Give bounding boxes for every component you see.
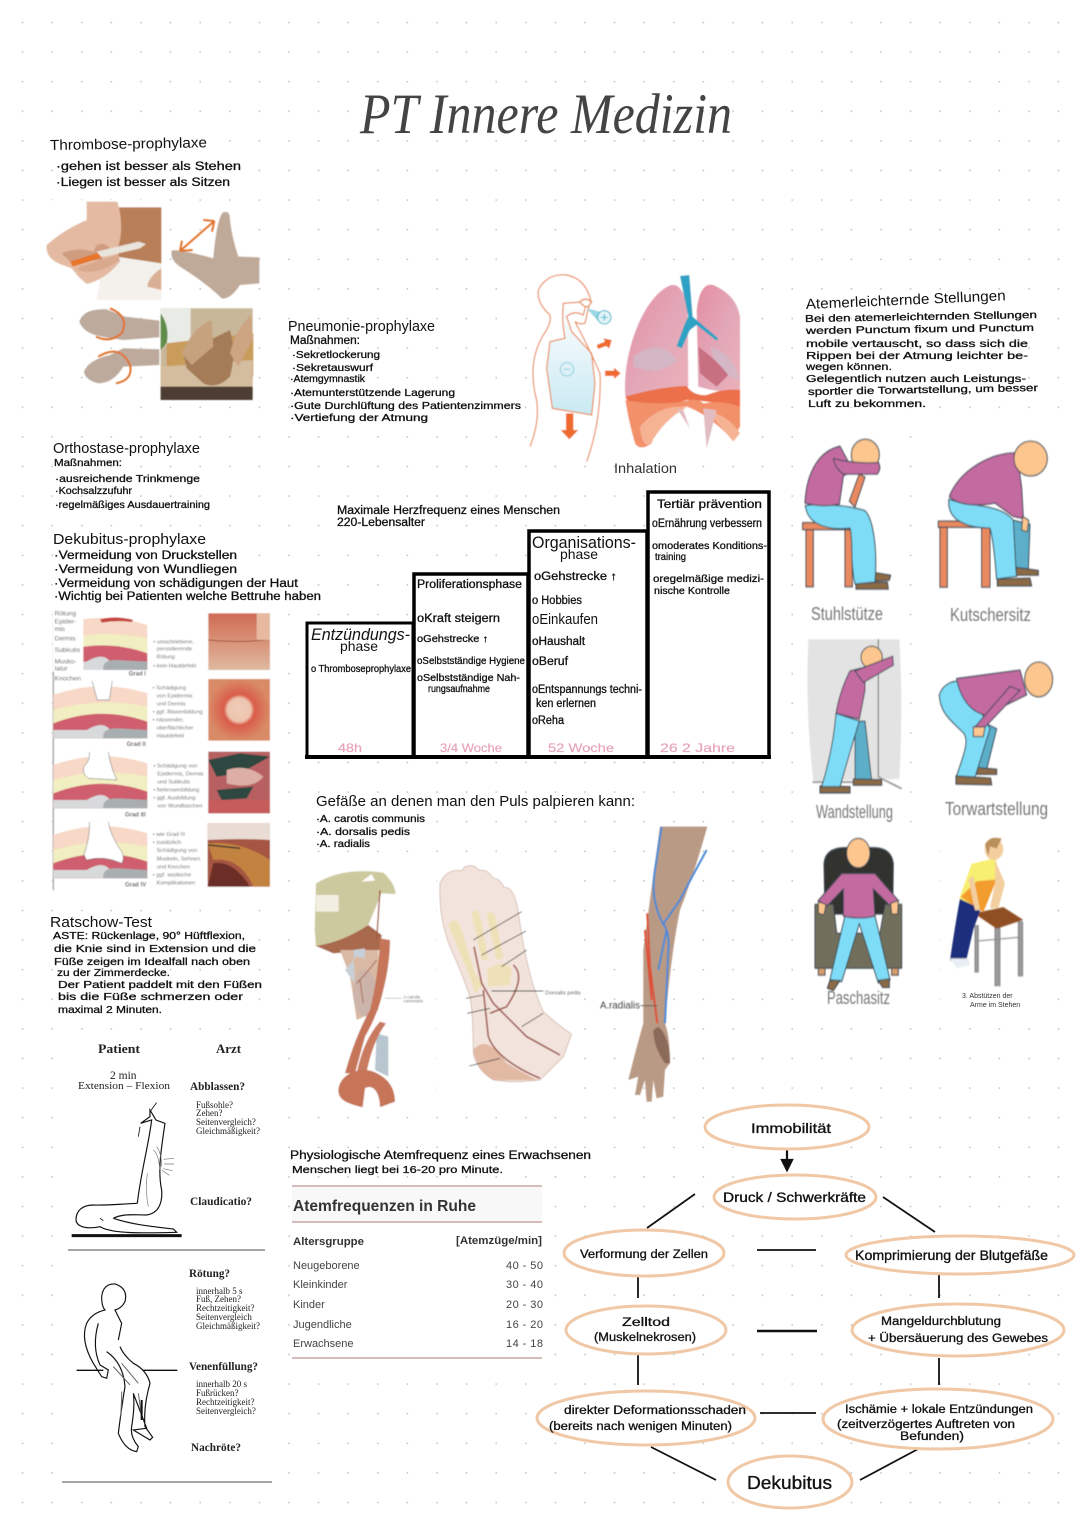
step: Organisationsphase: 52 Woche — [548, 741, 614, 755]
Grad II photo — [208, 679, 270, 741]
panel: Dekubitus-prophylaxe text: ·Vermeidung von Druckstellen — [54, 550, 237, 562]
panel: pulse points text: ·A. radialis — [316, 839, 370, 850]
posture: Kutschersitz — [935, 428, 1065, 628]
node: Dekubitus — [728, 1456, 852, 1508]
panel: Atemerleichternde Stellungen text: Bei den atemerleichternden Stellungen — [805, 310, 1037, 325]
Grad descriptions — [153, 640, 204, 886]
table header: Altersgruppe — [293, 1236, 364, 1248]
node: Mangeldurchblutung: + Übersäuerung des Gewebes — [868, 1333, 1048, 1345]
doctor checks lower: Fuß, Zehen? — [196, 1294, 241, 1304]
panel: Atemfrequenz note: Menschen liegt bei 16-20 pro Minute. — [292, 1165, 503, 1176]
Grad descriptions: • Schädigung — [153, 685, 186, 691]
doctor checks lower: Fußrücken? — [196, 1388, 238, 1398]
Grad descriptions: • wie Grad III — [153, 832, 186, 838]
panel: Atemerleichternde Stellungen text: wegen können. — [805, 362, 892, 373]
node: Mangeldurchblutung: Mangeldurchblutung — [881, 1316, 1001, 1328]
node: Ischämie: Ischämie + lokale Entzündungen — [845, 1404, 1033, 1416]
panel: max heart-rate note: Maximale Herzfrequenz eines Menschen — [337, 505, 560, 517]
step: Organisationsphase — [529, 531, 647, 757]
Grad descriptions: und Knochen — [157, 864, 190, 870]
Grad I skin diagram — [53, 608, 147, 672]
Grad III photo — [208, 752, 270, 813]
posture: Paschasitz — [810, 830, 920, 1016]
panel: Atemerleichternde Stellungen text: sportler die Torwartstellung, um besser — [808, 383, 1039, 398]
panel: Pneumonie-prophylaxe text: ·Atemunterstützende Lagerung — [290, 388, 455, 399]
panel: Ratschow-Test text: Der Patient paddelt mit den Füßen — [58, 980, 262, 991]
Grad descriptions: • kein Hautdefekt — [153, 664, 197, 670]
Grad I photo — [208, 613, 270, 670]
panel: Atemfrequenz note — [290, 1150, 591, 1176]
step: Organisationsphase: ken erlernen — [536, 698, 596, 710]
doctor checks lower: Rechtzeitigkeit? — [196, 1303, 254, 1313]
patient instruction: Extension – Flexion — [78, 1080, 171, 1092]
Grad labels: Grad III — [125, 812, 146, 818]
doctor checks lower: Nachröte? — [191, 1440, 241, 1454]
node: Komprimierung der Blutgefäße — [846, 1236, 1074, 1274]
Grad labels: Grad IV — [125, 883, 146, 889]
posture: Abstützen der Arme im Stehen — [940, 828, 1035, 1010]
anatomy layer labels: Epider- — [55, 618, 76, 625]
panel: Ratschow-Test text: ASTE: Rückenlage, 90° Hüftflexion, — [53, 931, 245, 942]
panel: Orthostase-prophylaxe text: Orthostase-prophylaxe — [53, 441, 200, 457]
anatomy layer labels — [55, 610, 81, 682]
panel: Atemfrequenz note: Physiologische Atemfrequenz eines Erwachsenen — [290, 1150, 591, 1162]
step: Organisationsphase: oEinkaufen — [532, 612, 598, 628]
table title: Atemfrequenzen in Ruhe — [293, 1198, 476, 1215]
panel: Ratschow-Test text: zu der Zimmerdecke. — [57, 968, 170, 979]
step: Organisationsphase: o Hobbies — [532, 595, 582, 607]
step: Organisationsphase: oBeruf — [532, 656, 569, 668]
node: Zelltod — [566, 1306, 726, 1354]
step: Proliferationsphase: oSelbstständige Hygiene — [417, 656, 525, 667]
divider upper — [68, 1249, 265, 1251]
posture: Wandstellung — [800, 632, 910, 826]
Grad descriptions: Hautdefekt — [157, 733, 184, 739]
illustration: foot with dorsalis pedis: Dorsalis pedis — [545, 991, 581, 997]
node: Druck / Schwerkräfte: Druck / Schwerkräfte — [723, 1189, 866, 1205]
Grad descriptions: und Dermis — [157, 701, 186, 707]
patient instruction — [78, 1070, 171, 1092]
illustration: neck with carotid artery — [313, 867, 423, 1110]
title: PT Innere Medizin — [359, 83, 732, 146]
step: Tertiär prävention: oErnährung verbessern — [652, 518, 762, 530]
Grad descriptions: persistierende — [157, 647, 192, 653]
step: Entzündungsphase: Entzündungs- — [311, 625, 410, 644]
node: Ischämie: Befunden) — [900, 1431, 964, 1443]
panel: Pneumonie-prophylaxe text: Maßnahmen: — [290, 335, 360, 347]
Grad descriptions: Muskeln, Sehnen — [157, 856, 200, 862]
panel: Atemerleichternde Stellungen text: Luft zu bekommen. — [808, 399, 926, 410]
panel: Ratschow figure — [60, 1035, 282, 1490]
panel: Dekubitus-prophylaxe text: ·Vermeidung von Wundliegen — [54, 564, 237, 576]
panel: Ratschow-Test text: bis die Füße schmerzen oder — [58, 992, 244, 1003]
Grad labels — [125, 671, 146, 889]
table rows: Kleinkinder — [293, 1279, 348, 1291]
step: Tertiär prävention: nische Kontrolle — [654, 586, 730, 597]
patient instruction: 2 min — [110, 1070, 137, 1082]
panel: Dekubitus Grad I-IV figure — [52, 608, 273, 890]
Grad descriptions: Rötung — [157, 655, 175, 661]
panel: Thrombose-prophylaxe text: ·gehen ist besser als Stehen — [56, 161, 241, 173]
panel: pulse points text: ·A. carotis communis — [316, 814, 425, 825]
step: Organisationsphase: phase — [560, 546, 598, 562]
panel: Pneumonie-prophylaxe text: ·Atemgymnastik — [290, 374, 366, 385]
Grad descriptions: Komplikationen — [157, 880, 195, 886]
Grad descriptions: Epidermis, Dermis — [157, 772, 204, 778]
panel: Pneumonie-prophylaxe text: ·Vertiefung der Atmung — [290, 413, 428, 424]
node: Immobilität — [705, 1105, 869, 1149]
illustration: patient sitting with legs hanging — [77, 1284, 177, 1452]
node: Zelltod: Zelltod — [622, 1317, 670, 1329]
node: direkter Deformationsschaden: direkter Deformationsschaden — [564, 1405, 746, 1417]
panel: Dekubitus-prophylaxe text — [53, 532, 321, 603]
node: Verformung der Zellen — [564, 1230, 724, 1276]
doctor checks lower: Seitenvergleich? — [196, 1406, 256, 1416]
illustration: forearm with radial artery — [600, 827, 707, 1102]
anatomy layer labels: Musko- — [55, 658, 76, 665]
doctor checks upper: Claudicatio? — [190, 1194, 252, 1208]
panel: Ratschow-Test text — [50, 915, 262, 1016]
doctor checks lower: Seitenvergleich — [196, 1312, 252, 1322]
Grad IV photo — [208, 823, 270, 887]
connector lines — [638, 1194, 939, 1480]
table header: [Atemzüge/min] — [456, 1235, 542, 1247]
panel: Pneumonie-prophylaxe text: ·Sekretauswurf — [292, 363, 373, 374]
anatomy layer labels: mis — [55, 626, 66, 633]
posture: Abstützen der Arme im Stehen: 3. Abstützen der — [962, 993, 1013, 1000]
doctor checks upper: Zehen? — [196, 1108, 222, 1118]
column headings: Arzt — [216, 1041, 242, 1056]
divider lower — [62, 1481, 272, 1483]
step: Tertiär prävention: Tertiär prävention — [657, 499, 762, 511]
step: Entzündungsphase: phase — [340, 638, 378, 654]
illustration: foot with dorsalis pedis — [437, 863, 583, 1093]
arrow: Immobilität to Druck — [782, 1150, 792, 1170]
panel: Orthostase-prophylaxe text: Maßnahmen: — [54, 458, 122, 469]
diagram: Dekubitus flowchart — [537, 1105, 1074, 1508]
posture: Abstützen der Arme im Stehen: Arme im Stehen — [970, 1002, 1020, 1009]
table rows: Kinder — [293, 1299, 325, 1311]
anatomy layer labels: Subkutis — [55, 647, 81, 654]
illustration: neck with carotid artery: communis — [403, 999, 423, 1004]
panel: Dekubitus-prophylaxe text: Dekubitus-prophylaxe — [53, 532, 206, 548]
Grad II skin diagram — [53, 678, 147, 738]
node: Ischämie — [823, 1389, 1053, 1449]
panel: Orthostase-prophylaxe text: ·Kochsalzzufuhr — [55, 486, 133, 497]
table rows: 30 - 40 — [506, 1279, 543, 1291]
node: Komprimierung der Blutgefäße: Komprimierung der Blutgefäße — [855, 1247, 1048, 1263]
staircase baseline — [305, 755, 771, 759]
Grad labels: Grad I — [129, 671, 146, 677]
Grad III skin diagram — [53, 747, 147, 808]
panel: Orthostase-prophylaxe text — [53, 441, 210, 511]
Grad descriptions: • nässender, — [153, 717, 184, 723]
step: Organisationsphase: Organisations- — [532, 533, 636, 552]
Grad descriptions: oberflächlicher — [157, 725, 194, 731]
step: Proliferationsphase: oSelbstständige Nah- — [417, 673, 520, 684]
doctor checks lower: Rötung? — [189, 1266, 230, 1280]
doctor checks upper: Abblassen? — [190, 1079, 245, 1093]
anatomy layer labels: Rötung — [55, 610, 76, 617]
posture: Wandstellung: Wandstellung — [816, 802, 893, 822]
table: Atemfrequenzen in Ruhe — [291, 1186, 543, 1358]
Grad IV skin diagram — [53, 817, 147, 878]
step: Organisationsphase: oGehstrecke ↑ — [534, 571, 617, 583]
column headings — [98, 1041, 242, 1056]
doctor checks lower: Rechtzeitigkeit? — [196, 1397, 254, 1407]
panel: Atemerleichternde Stellungen text: werden Punctum fixum und Punctum — [804, 323, 1034, 337]
doctor checks upper: Seitenvergleich? — [196, 1117, 256, 1127]
Grad labels: Grad II — [127, 742, 146, 748]
panel: Dekubitus-prophylaxe text: ·Vermeidung von schädigungen der Haut — [54, 578, 299, 590]
node: direkter Deformationsschaden — [537, 1391, 755, 1445]
panel: Thrombose-prophylaxe text: Thrombose-prophylaxe — [50, 135, 207, 154]
panel: pulse points text: Gefäße an denen man den Puls palpieren kann: — [316, 794, 635, 810]
panel: Pneumonie-prophylaxe text — [288, 319, 521, 424]
doctor checks lower — [189, 1266, 260, 1454]
panel: Orthostase-prophylaxe text: ·regelmäßiges Ausdauertraining — [55, 500, 210, 511]
panel: Thrombose-prophylaxe text: ·Liegen ist besser als Sitzen — [56, 177, 230, 189]
table rows: 20 - 30 — [506, 1299, 543, 1311]
step: Entzündungsphase: o Thromboseprophylaxe — [311, 664, 411, 675]
illustration: neck with carotid artery: A.carotis — [403, 994, 420, 999]
panel: Pneumonie-prophylaxe text: Pneumonie-prophylaxe — [288, 319, 435, 335]
panel: Atemerleichternde postures — [795, 428, 1065, 1016]
step: Proliferationsphase: Proliferationsphase — [417, 579, 522, 591]
illustration: lungs and inhalation — [527, 270, 740, 463]
posture: Stuhlstütze — [795, 428, 905, 628]
anatomy layer labels: Dermis — [55, 636, 76, 643]
step: Organisationsphase: oEntspannungs techni- — [532, 684, 642, 696]
label: Inhalation: Inhalation — [614, 461, 677, 476]
posture: Torwartstellung: Torwartstellung — [945, 799, 1048, 819]
node: Zelltod: (Muskelnekrosen) — [594, 1332, 696, 1344]
table header — [293, 1235, 542, 1248]
step: Proliferationsphase: oKraft steigern — [417, 613, 500, 625]
anatomy layer labels: Knochen — [55, 675, 81, 682]
step: Tertiär prävention: omoderates Konditions- — [652, 541, 767, 552]
panel: Ratschow-Test text: Füße zeigen im Idealfall nach oben — [54, 957, 250, 968]
Grad descriptions: • zusätzlich — [153, 840, 181, 846]
node: direkter Deformationsschaden: (bereits nach wenigen Minuten) — [549, 1421, 732, 1433]
doctor checks lower: Venenfüllung? — [189, 1359, 258, 1373]
table rows — [293, 1260, 543, 1350]
doctor checks lower: innerhalb 20 s — [196, 1379, 247, 1389]
panel: Ratschow-Test text: die Knie sind in Extension und die — [54, 944, 257, 955]
Grad descriptions: von Epidermis — [157, 693, 193, 699]
panel: Atemerleichternde Stellungen text: Gelegentlich nutzen auch Leistungs- — [806, 374, 1026, 385]
step: Tertiär prävention: 26 2 Jahre — [660, 741, 735, 755]
panel: Ratschow-Test text: maximal 2 Minuten. — [58, 1005, 162, 1016]
Grad descriptions: • ggf. septische — [153, 872, 191, 878]
node: Mangeldurchblutung — [852, 1304, 1064, 1356]
step: Entzündungsphase — [307, 623, 413, 757]
posture: Paschasitz: Paschasitz — [827, 988, 890, 1008]
panel: Atemerleichternde Stellungen text — [804, 288, 1039, 410]
step: Proliferationsphase: oGehstrecke ↑ — [417, 634, 488, 645]
step: Organisationsphase: oHaushalt — [532, 636, 586, 648]
posture: Kutschersitz: Kutschersitz — [950, 605, 1031, 625]
chart: rehabilitation phases staircase — [305, 492, 771, 757]
doctor checks upper: Gleichmäßigkeit? — [196, 1126, 260, 1136]
step: Proliferationsphase: 3/4 Woche — [440, 741, 502, 755]
panel: Dekubitus-prophylaxe text: ·Wichtig bei Patienten welche Bettruhe haben — [54, 591, 321, 603]
table rows: 14 - 18 — [506, 1338, 543, 1350]
panel: Ratschow-Test text: Ratschow-Test — [50, 915, 152, 931]
panel: Atemerleichternde Stellungen text: mobile vertauscht, so dass sich die — [806, 339, 1029, 350]
panel: pulse points text — [316, 794, 635, 850]
panel: Orthostase-prophylaxe text: ·ausreichende Trinkmenge — [55, 474, 201, 485]
table rows: Neugeborene — [293, 1260, 360, 1272]
panel: Pneumonie-prophylaxe text: ·Sekretlockerung — [292, 350, 380, 361]
step: Tertiär prävention: training — [655, 552, 686, 563]
panel: Atemerleichternde Stellungen text: Atemerleichternde Stellungen — [805, 288, 1006, 313]
Grad descriptions: Schädigung von — [157, 848, 197, 854]
node: Verformung der Zellen: Verformung der Zellen — [580, 1249, 708, 1261]
doctor checks upper: Fußsohle? — [196, 1100, 233, 1110]
step: Organisationsphase: oReha — [532, 715, 565, 727]
panel: Thrombose-prophylaxe text — [50, 135, 241, 189]
table rows: 40 - 50 — [506, 1260, 543, 1272]
column headings: Patient — [98, 1041, 141, 1056]
step: Tertiär prävention — [648, 492, 769, 757]
Grad descriptions: • ggf. Ausbildung — [153, 796, 196, 802]
panel: max heart-rate note: 220-Lebensalter — [337, 517, 425, 529]
node: Druck / Schwerkräfte — [714, 1175, 876, 1219]
anatomy layer labels: latur — [55, 666, 68, 673]
panel: Pneumonie-prophylaxe text: ·Gute Durchlüftung des Patientenzimmers — [290, 401, 521, 412]
step: Tertiär prävention: oregelmäßige medizi- — [653, 574, 764, 585]
node: Immobilität: Immobilität — [751, 1120, 831, 1136]
table rows: 16 - 20 — [506, 1319, 543, 1331]
table rows: Jugendliche — [293, 1319, 352, 1331]
doctor checks lower: Gleichmäßigkeit? — [196, 1321, 260, 1331]
posture: Torwartstellung — [930, 632, 1065, 824]
Grad descriptions: • Schädigung von — [153, 764, 197, 770]
Grad descriptions: und Subkutis — [157, 780, 190, 786]
panel: Atemerleichternde Stellungen text: Rippen bei der Atmung leichter be- — [806, 351, 1028, 362]
panel: pulse points text: ·A. dorsalis pedis — [316, 827, 410, 838]
node: Ischämie: (zeitverzögertes Auftreten von — [837, 1419, 1015, 1431]
Grad descriptions: • umschriebene, — [153, 640, 194, 646]
Grad descriptions: von Wundtaschen — [157, 804, 203, 810]
Grad descriptions: • ggf. Blasenbildung — [153, 709, 203, 715]
Grad descriptions: • Nekrosenbildung — [153, 788, 199, 794]
doctor checks lower: innerhalb 5 s — [196, 1286, 243, 1296]
doctor checks upper — [190, 1079, 260, 1208]
node: Dekubitus: Dekubitus — [747, 1473, 832, 1493]
step: Proliferationsphase — [414, 574, 528, 757]
step: Entzündungsphase: 48h — [338, 741, 362, 755]
panel: max heart-rate note — [337, 505, 560, 529]
panel: Thrombose images — [46, 200, 259, 400]
step: Proliferationsphase: rungsaufnahme — [428, 684, 490, 695]
illustration: forearm with radial artery: A.radialis — [600, 1001, 640, 1012]
illustration: patient lying with legs raised — [72, 1103, 182, 1236]
posture: Stuhlstütze: Stuhlstütze — [811, 604, 883, 624]
table rows: Erwachsene — [293, 1338, 354, 1350]
